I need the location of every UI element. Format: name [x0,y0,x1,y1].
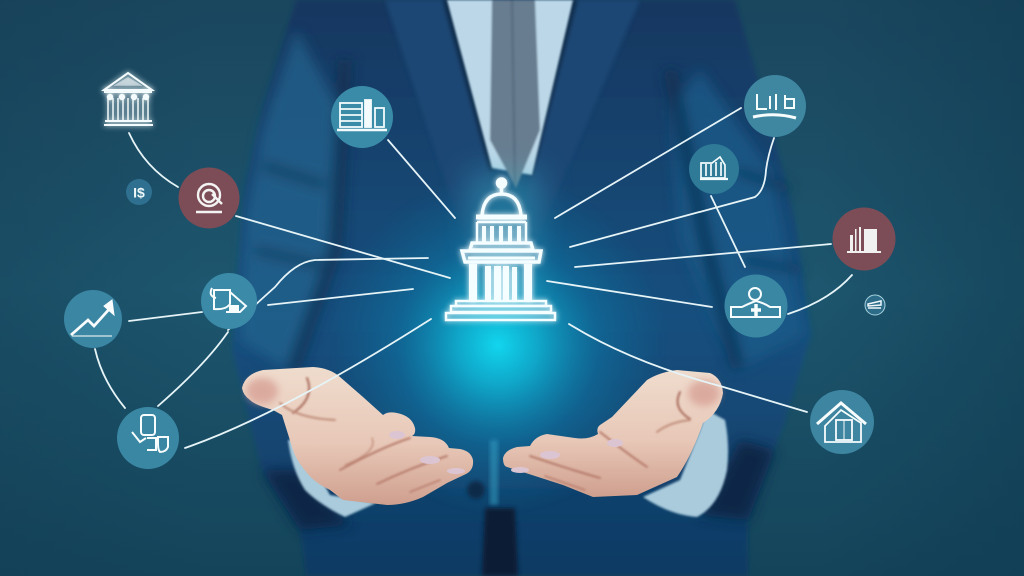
central glow [328,170,668,576]
icon: buildings circle top [331,86,393,148]
icon: red circle chart [832,208,896,270]
icon: small buildings circle [689,144,739,194]
icon: house circle [810,390,874,454]
icon: bank building [104,73,153,125]
columns [469,264,532,300]
right cuff [643,410,728,517]
right hand [503,370,728,517]
left hand [242,367,473,517]
icon: shield circle [117,407,179,469]
businessman suit [232,0,811,576]
shirt and tie [447,0,573,188]
dome [476,179,527,217]
icon: home finance circle [724,274,788,338]
right palm and fingers [503,370,723,497]
connector lines [95,108,852,448]
central capitol icon [446,179,555,320]
right fingernails [511,439,623,473]
left thumb tip shading [246,378,278,404]
entablature [462,251,541,262]
right thumb tip shading [688,380,720,406]
icon: small card badge [865,295,885,315]
left palm and fingers [242,367,473,505]
icon: dollar badge [126,179,152,205]
icon: dollar badge: I$ [133,184,145,200]
right hand creases [530,392,690,490]
icon: growth arrow [64,290,122,348]
left fingernails [389,431,465,474]
steps [446,301,555,320]
drum with columns [470,222,533,250]
icon: document circle [201,273,257,329]
lapels [385,0,640,300]
icon: red circle target [178,168,240,228]
left hand creases [280,378,447,492]
icon: institution circle top right [744,75,806,137]
left cuff [288,440,376,517]
